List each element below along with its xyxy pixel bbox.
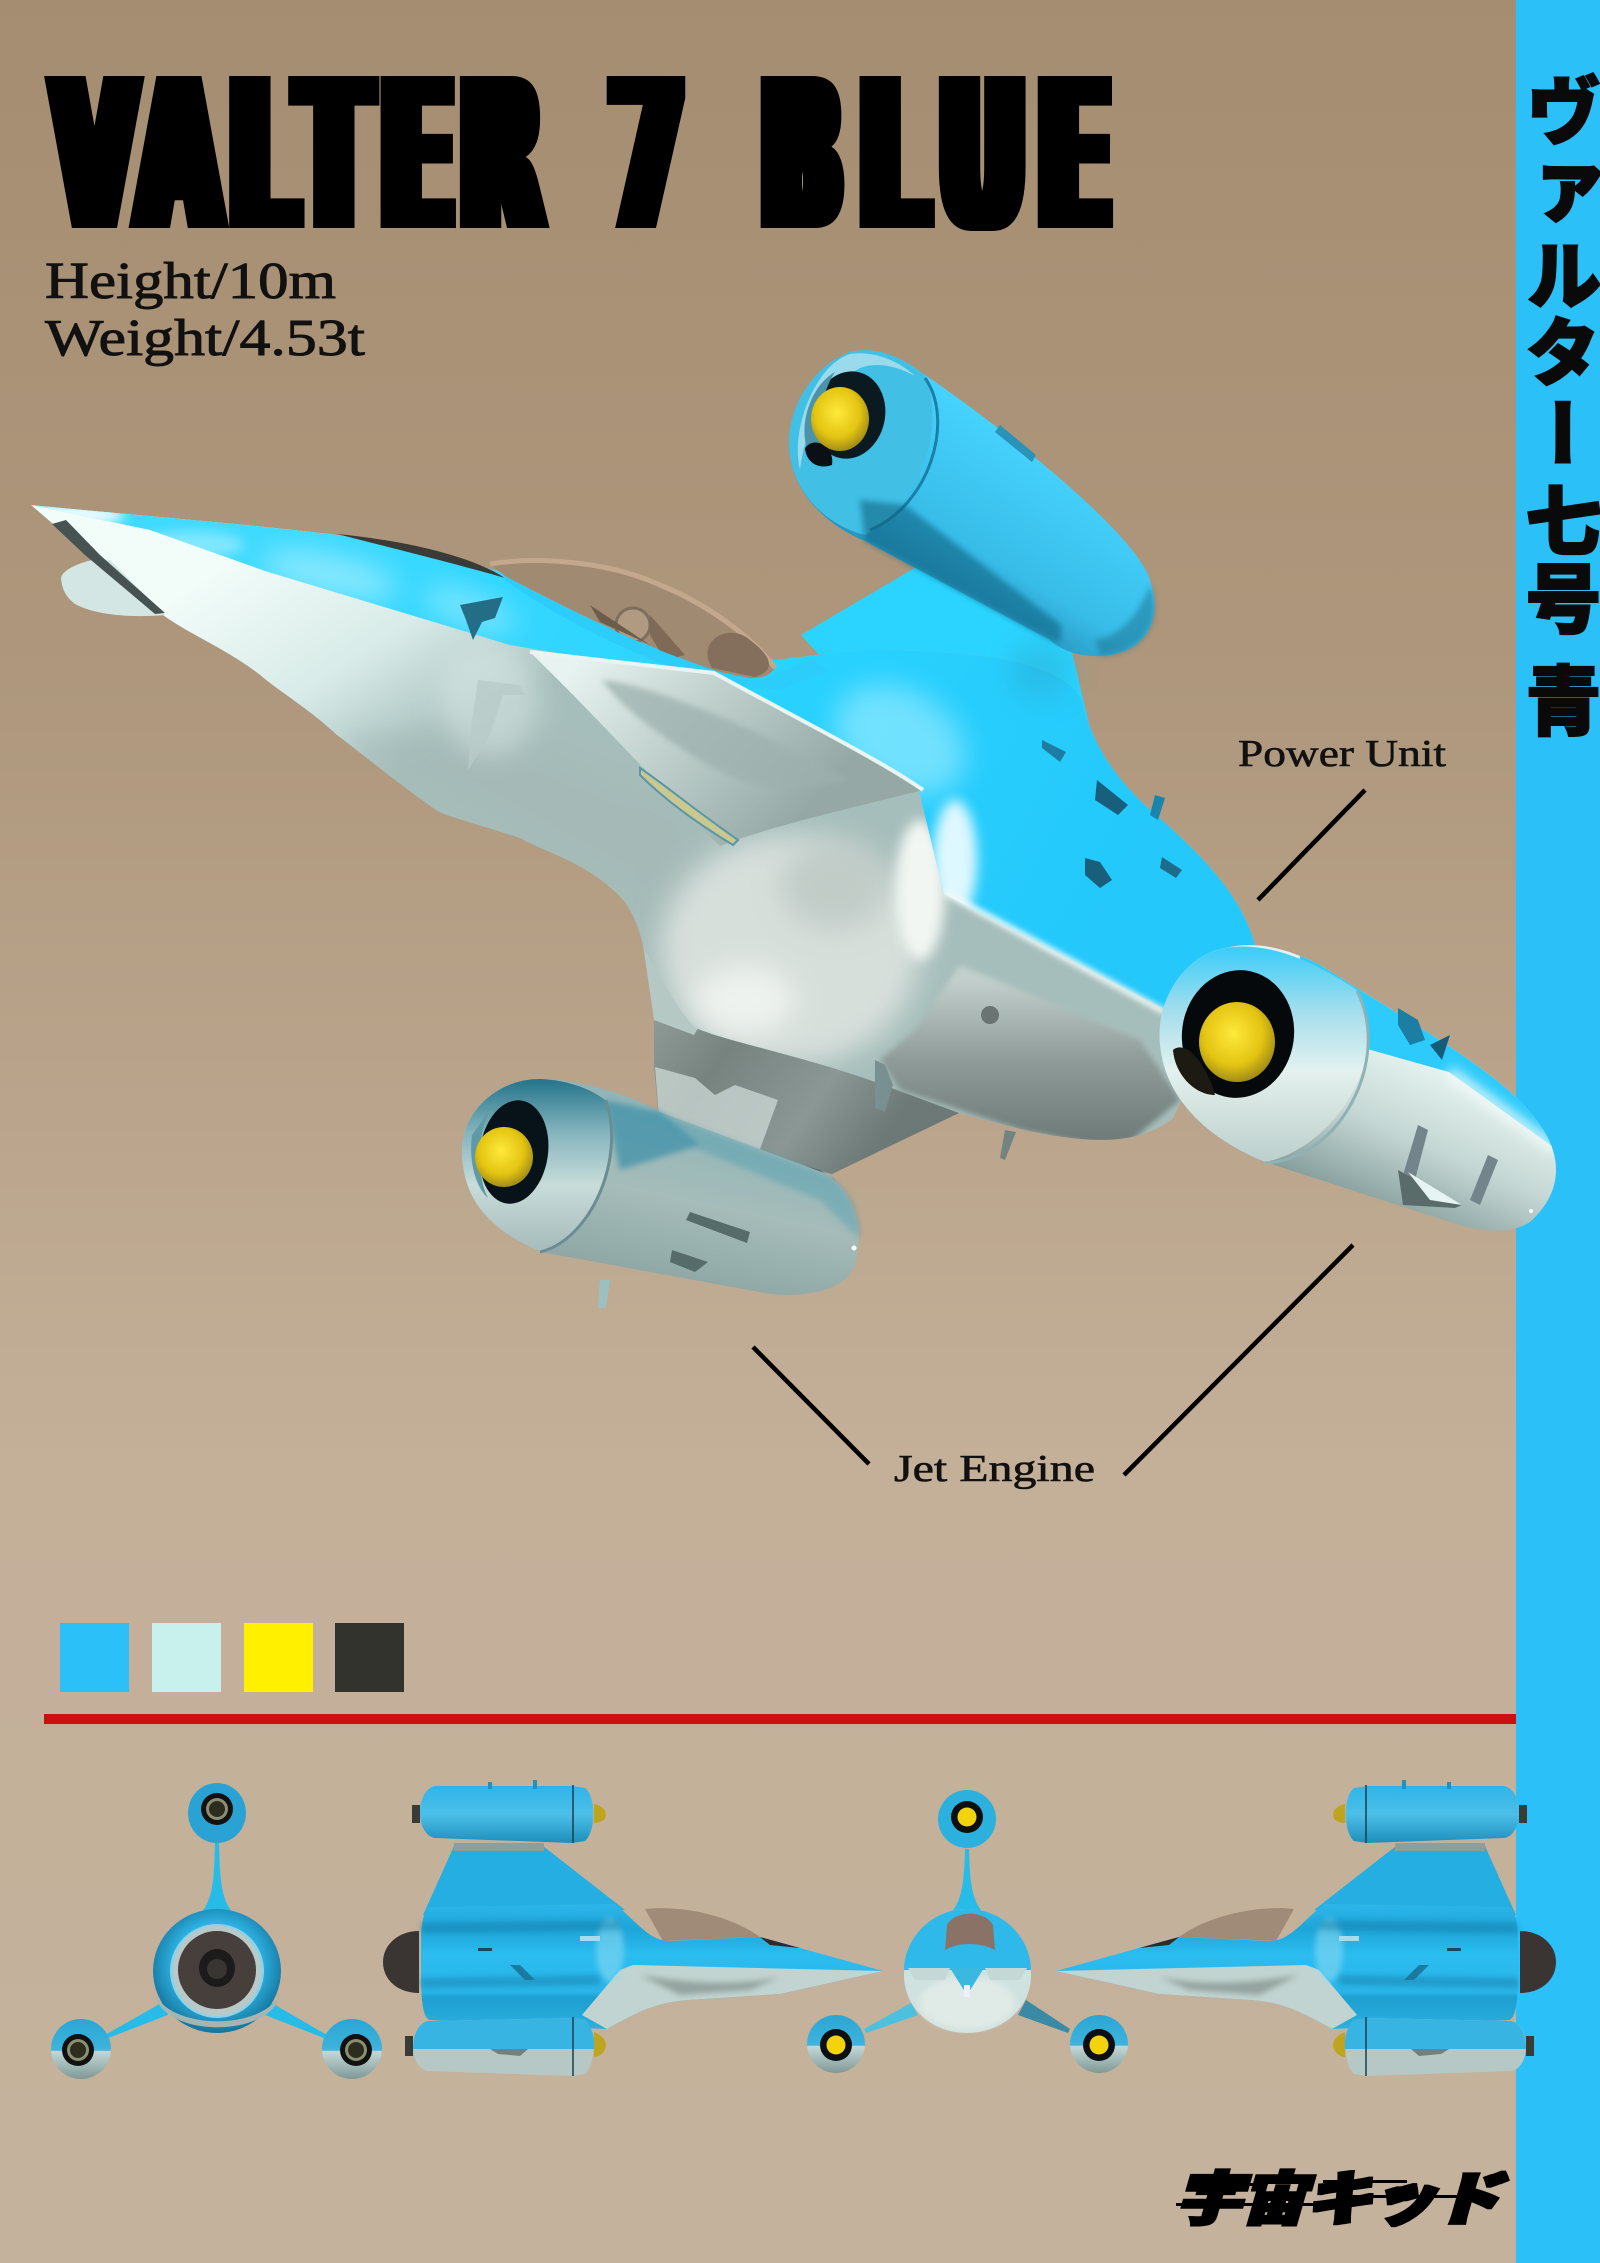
plan view left bbox=[383, 1780, 883, 2076]
vertical japanese title bbox=[1509, 72, 1600, 738]
callout: jet engine: Jet Engine bbox=[894, 1448, 1095, 1490]
dark nose panel bbox=[337, 534, 505, 578]
rear view bbox=[51, 1783, 382, 2079]
vertical japanese title: タ bbox=[1514, 313, 1598, 389]
colour swatches bbox=[60, 1623, 404, 1692]
sidebar bbox=[1516, 0, 1600, 2263]
panel: main spacecraft render bbox=[15, 350, 1600, 1308]
fuselage shading and blue paint bbox=[15, 500, 1300, 1150]
specs: weight: Weight/4.53t bbox=[45, 310, 366, 367]
nose chin intake bbox=[52, 520, 165, 616]
lower wing bbox=[643, 945, 959, 1190]
intake cone bbox=[475, 1127, 533, 1187]
wing mottling bbox=[1008, 642, 1072, 698]
logo: 宇宙キッド bbox=[1172, 2166, 1515, 2233]
lower left jet engine bbox=[462, 1079, 860, 1308]
intake cone bbox=[1199, 1002, 1275, 1082]
front view bbox=[807, 1790, 1128, 2073]
vertical japanese title: ル bbox=[1514, 236, 1598, 312]
upper jet engine bbox=[789, 350, 1154, 656]
title: VALTER 7 BLUE bbox=[55, 34, 1110, 277]
vertical japanese title: ー bbox=[1514, 395, 1598, 471]
plan view right bbox=[1056, 1780, 1556, 2076]
upper wing bbox=[801, 566, 1100, 800]
cockpit sill bbox=[505, 576, 830, 690]
vertical japanese title: 七 bbox=[1514, 482, 1600, 558]
big right jet engine bbox=[1160, 945, 1556, 1231]
fuselage pale underside bbox=[31, 505, 1255, 1140]
vertical japanese title: 号 bbox=[1514, 560, 1598, 636]
vertical japanese title: 青 bbox=[1514, 662, 1598, 738]
side strake bbox=[530, 652, 923, 846]
cockpit canopy bbox=[490, 561, 775, 678]
callout: power unit bbox=[1238, 733, 1447, 900]
callout: jet engine bbox=[753, 1245, 1353, 1490]
red divider bbox=[44, 1714, 1516, 1724]
intake cone bbox=[811, 387, 869, 451]
vertical japanese title: ヴ bbox=[1514, 72, 1598, 148]
fuselage panel details bbox=[460, 597, 1182, 1160]
callout: power unit: Power Unit bbox=[1238, 733, 1447, 775]
specs: height: Height/10m bbox=[45, 253, 336, 310]
